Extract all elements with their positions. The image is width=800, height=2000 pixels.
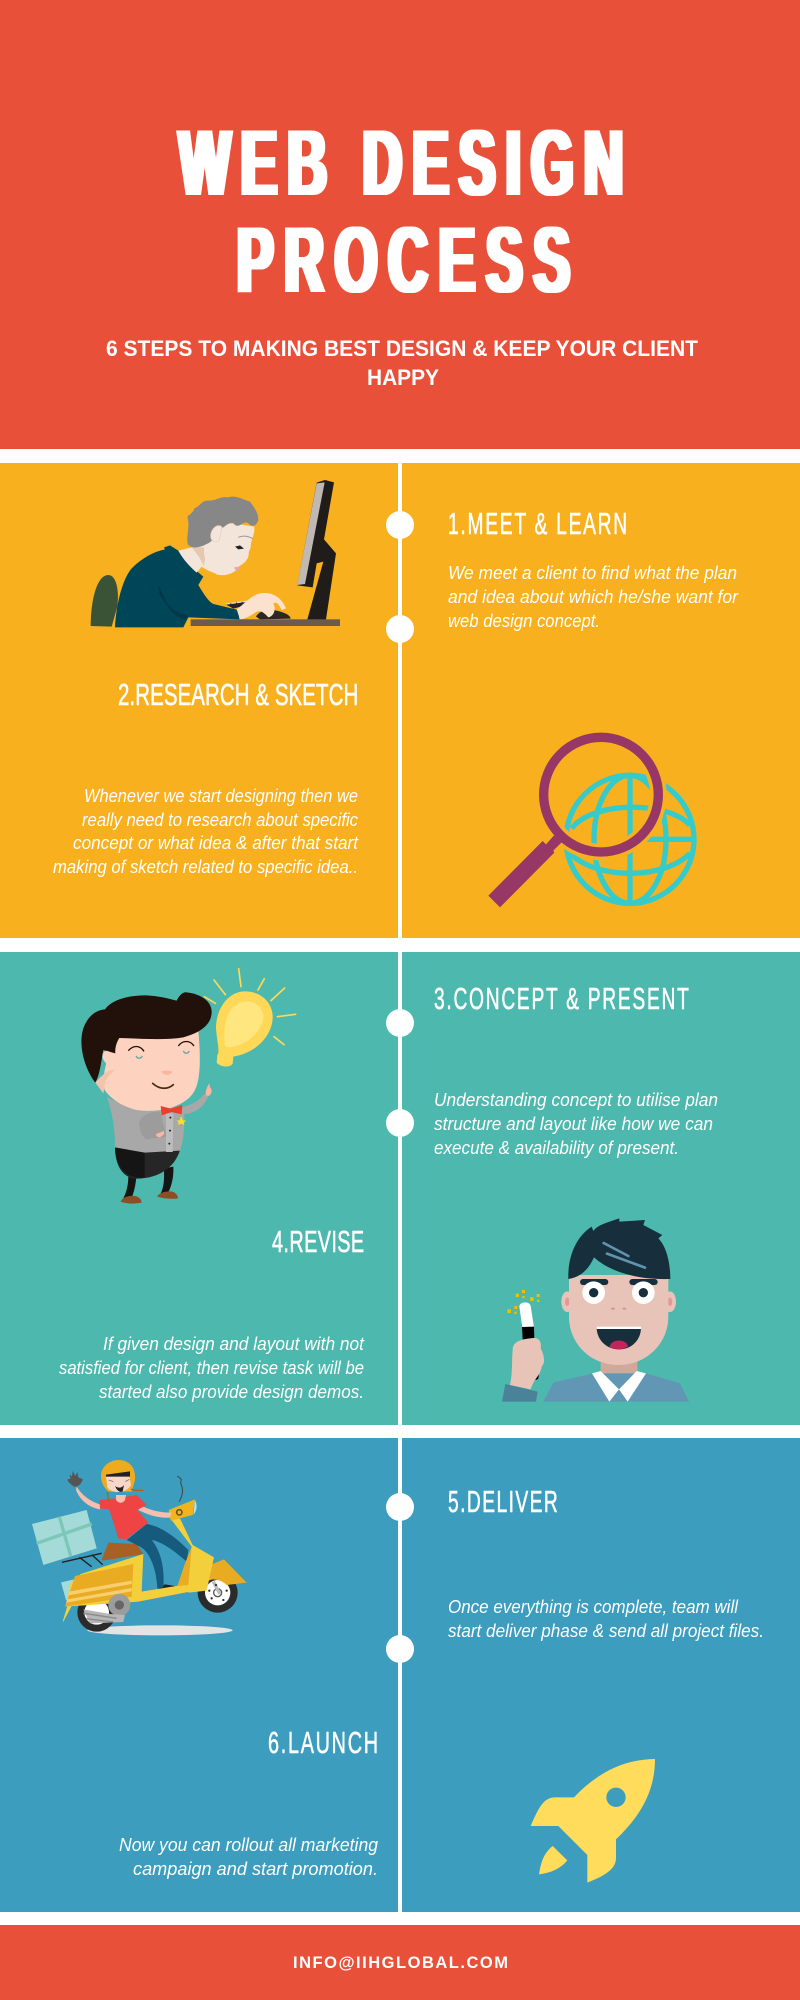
text: step 1: We meet a client to find what the plan	[448, 563, 737, 583]
text: step 4: satisfied for client, then revise task will be	[59, 1358, 364, 1378]
panel: steps 5 and 6	[0, 1438, 800, 1912]
icon: man with lightbulb idea	[81, 969, 296, 1204]
icon: rocket	[531, 1759, 655, 1883]
text: step 4: started also provide design demos.	[99, 1382, 364, 1402]
text: step 4: If given design and layout with not	[103, 1334, 365, 1354]
timeline dot: step 5	[386, 1493, 414, 1521]
icon: delivery scooter	[32, 1460, 247, 1635]
subtitle: 6 STEPS TO MAKING BEST DESIGN & KEEP YOUR CLIENT	[106, 336, 699, 361]
timeline dot: step 2	[386, 615, 414, 643]
text: step 3: structure and layout like how we can	[434, 1114, 713, 1134]
text: step 4	[59, 1334, 365, 1402]
text: step 2: really need to research about specific	[82, 810, 358, 830]
icon: man at computer	[91, 480, 340, 627]
timeline dot: step 6	[386, 1635, 414, 1663]
text: step 1: and idea about which he/she want for	[448, 587, 739, 607]
panel: steps 1 and 2	[0, 463, 800, 938]
text: step 3: Understanding concept to utilise plan	[434, 1090, 718, 1110]
panel: steps 3 and 4	[0, 952, 800, 1425]
heading: step 5: 5.DELIVER	[448, 1486, 558, 1519]
text: step 2: making of sketch related to specific idea..	[53, 857, 358, 877]
text: step 5: start deliver phase & send all project files.	[448, 1621, 764, 1641]
heading: step 4: 4.REVISE	[272, 1223, 364, 1259]
text: step 1: web design concept.	[448, 611, 600, 631]
text: step 1	[448, 563, 739, 631]
icon: smiling man with marker	[502, 1218, 689, 1402]
title: WEB DESIGN	[179, 111, 623, 216]
heading: step 6: 6.LAUNCH	[268, 1724, 378, 1760]
icon: magnifier over globe	[488, 737, 694, 907]
timeline dot: step 1	[386, 511, 414, 539]
title	[179, 111, 623, 313]
text: step 2: concept or what idea & after that start	[73, 833, 359, 853]
text: step 5	[448, 1597, 764, 1641]
text: step 2	[53, 786, 359, 877]
text: step 5: Once everything is complete, team will	[448, 1597, 739, 1617]
text: step 3	[434, 1090, 718, 1158]
footer email: INFO@IIHGLOBAL.COM	[293, 1954, 508, 1972]
text: step 6: Now you can rollout all marketing	[119, 1835, 378, 1855]
timeline dot: step 4	[386, 1109, 414, 1137]
text: step 3: execute & availability of present.	[434, 1138, 679, 1158]
text: step 6: campaign and start promotion.	[133, 1859, 378, 1879]
timeline dot: step 3	[386, 1009, 414, 1037]
subtitle: HAPPY	[367, 365, 439, 390]
text: step 6	[119, 1835, 378, 1879]
heading: step 1: 1.MEET & LEARN	[448, 508, 627, 541]
heading: step 3: 3.CONCEPT & PRESENT	[434, 983, 689, 1016]
text: step 2: Whenever we start designing then we	[84, 786, 358, 806]
panel: footer	[0, 1925, 800, 2000]
panel: header	[0, 0, 800, 449]
title: PROCESS	[237, 208, 570, 313]
subtitle	[106, 336, 699, 390]
heading: step 2: 2.RESEARCH & SKETCH	[118, 677, 358, 712]
